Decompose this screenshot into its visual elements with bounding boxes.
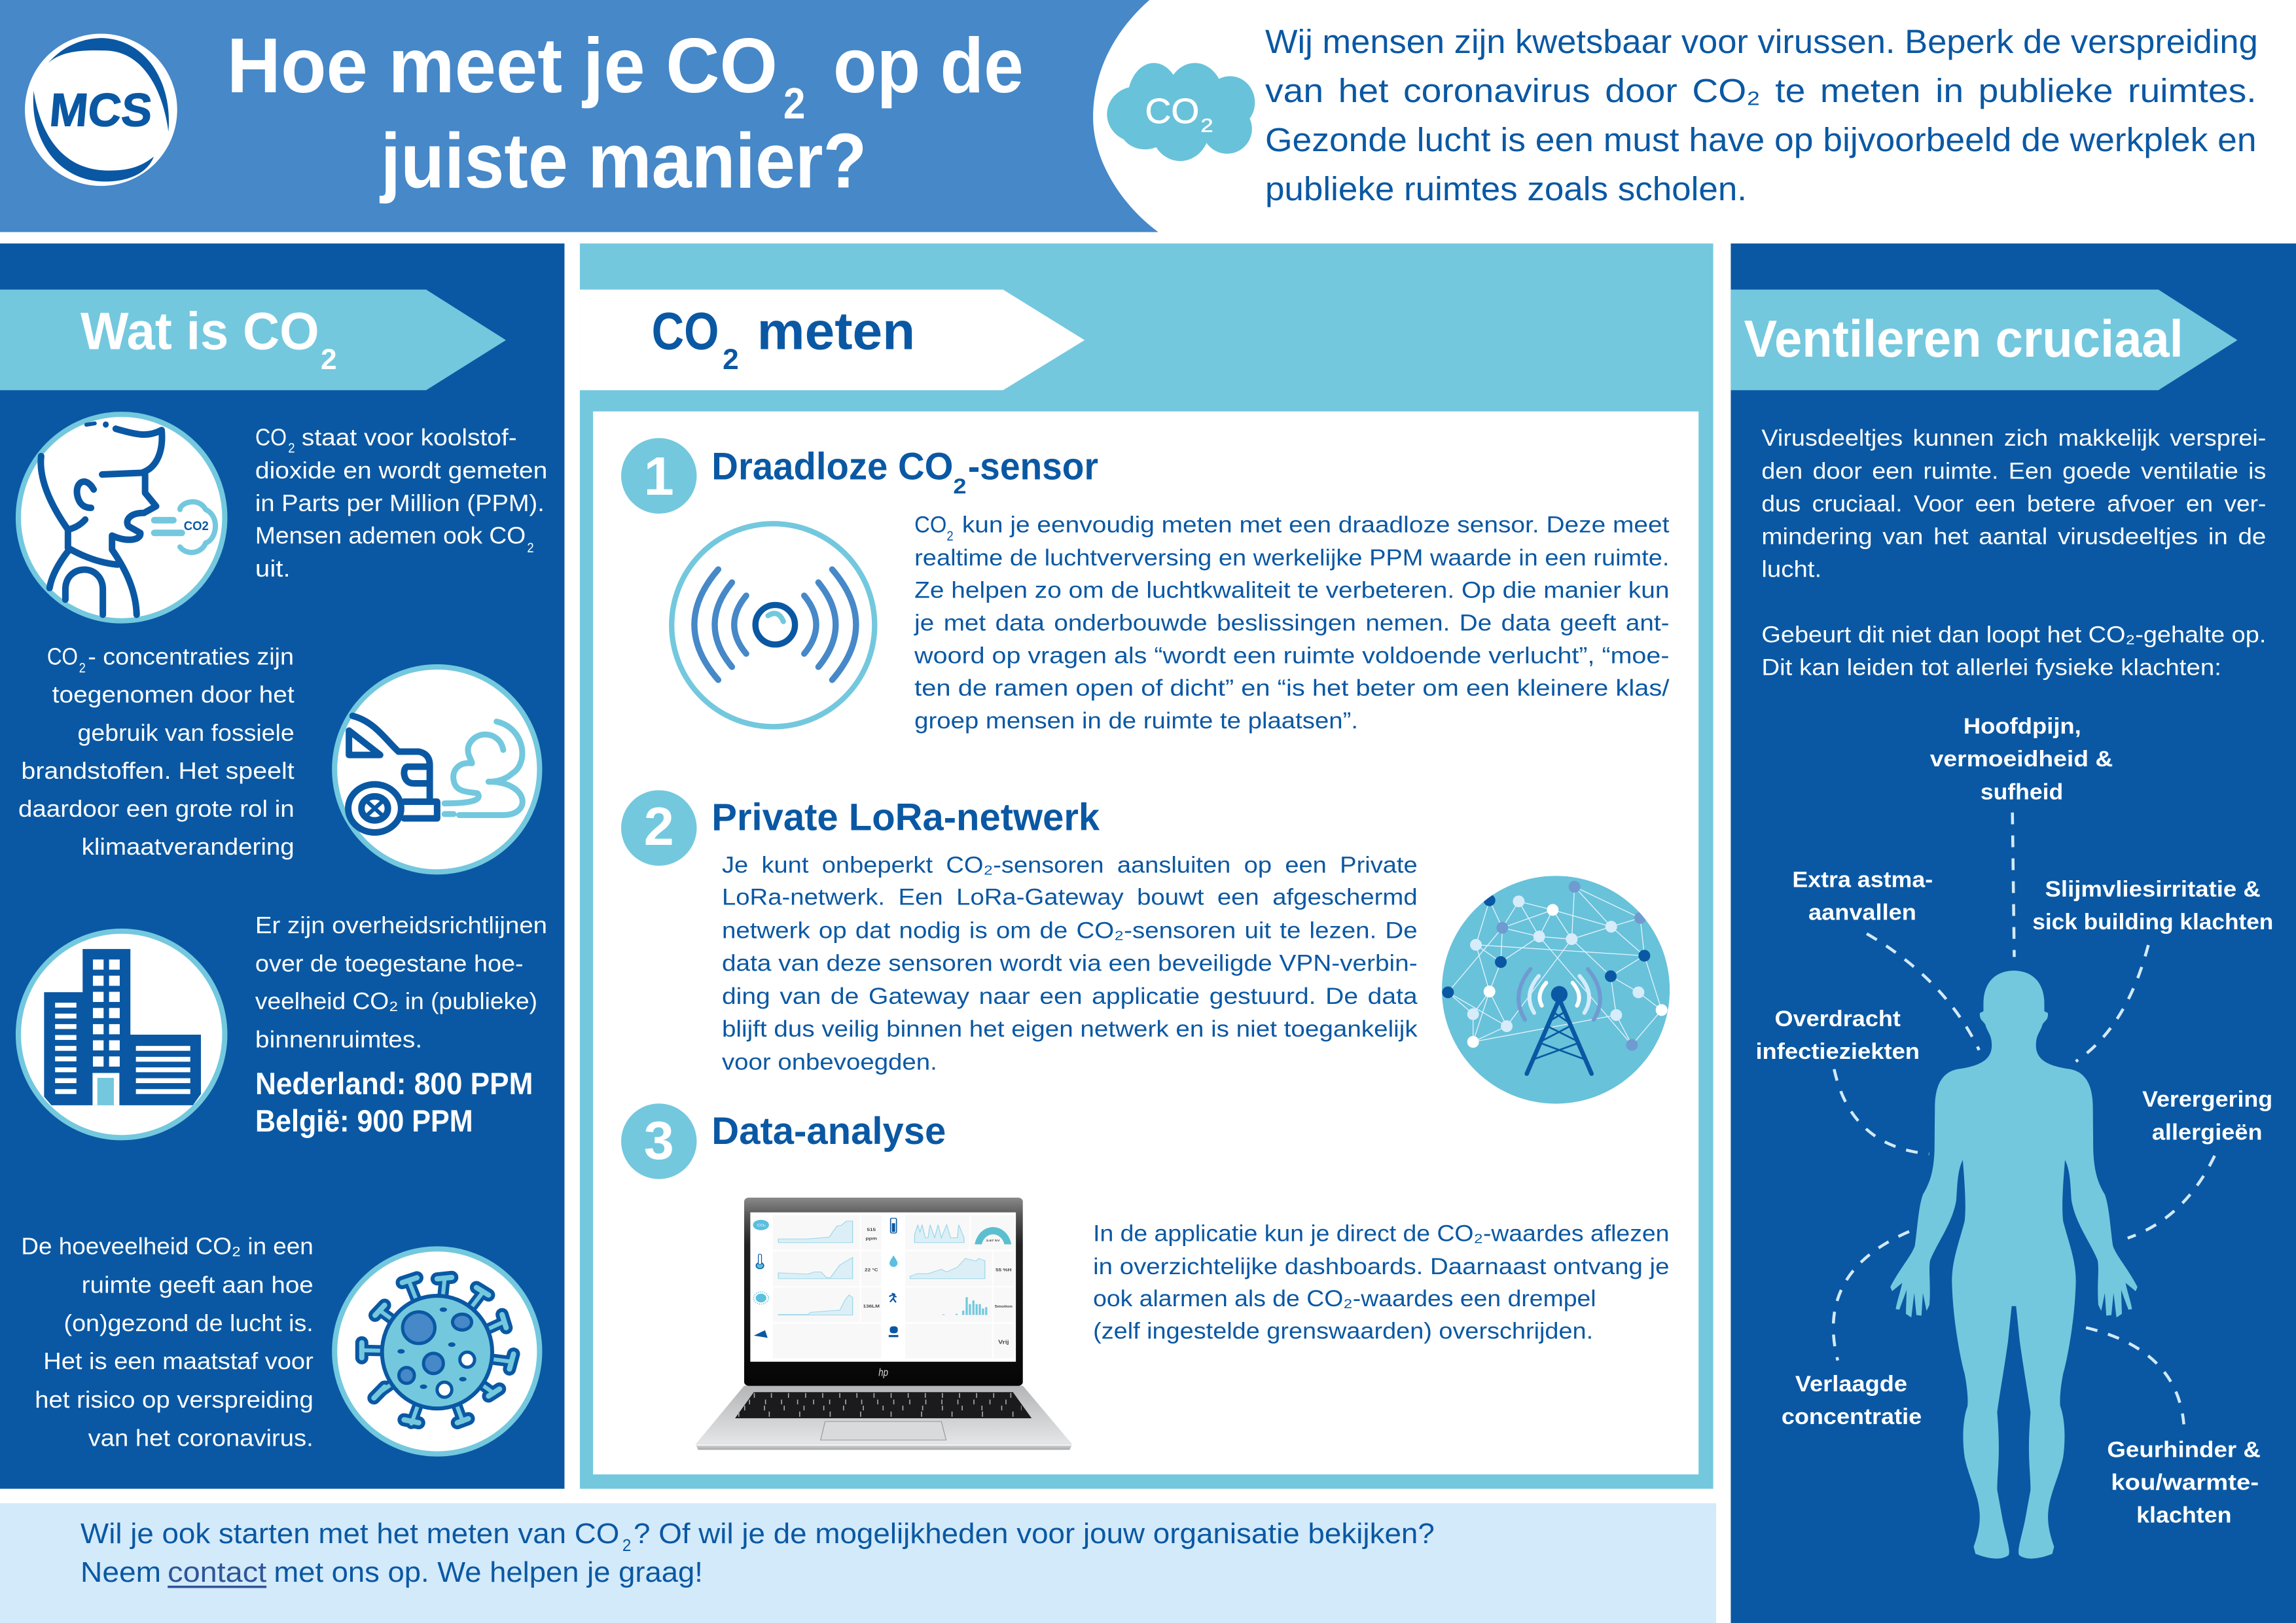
laptop with dashboard [696,1198,1072,1450]
text: LoRa description: netwerk op dat nodig is om de CO₂-sensoren uit te lezen. De [722,918,1418,943]
panel: CO2 meten [580,243,1713,1489]
logo: MCS [25,33,177,186]
call to action bar: Neem [81,1557,161,1588]
text: LoRa description: blijft dus veilig binnen het eigen netwerk en is niet toegankelijk [722,1016,1418,1042]
text: air quality: (on)gezond de lucht is. [64,1310,314,1336]
text: LoRa description: data van deze sensoren wordt via een beveiligde VPN-verbin- [722,950,1418,976]
intro text: Wij mensen zijn kwetsbaar voor virussen. Beperk de verspreiding [1265,22,2258,60]
text: LoRa description: Je kunt onbeperkt CO₂-sensoren aansluiten op een Private [722,852,1418,878]
title: 2 [783,79,805,128]
text: dashboard description: in overzichtelijke dashboards. Daarnaast ontvang je [1093,1254,1669,1279]
text: air quality: ruimte geeft aan hoe [82,1272,314,1298]
heading arrow: Wat is CO2: 2 [321,343,337,376]
text: dashboard description: ook alarmen als de CO₂-waardes een drempel [1093,1286,1596,1311]
call to action bar: contact [168,1557,266,1588]
dashboard values [863,1227,1013,1346]
text: sensor description: groep mensen in de ruimte te plaatsen”. [914,708,1358,734]
complaint labels: Overdracht [1775,1007,1901,1031]
dashboard values: 515 [867,1227,876,1232]
text: air quality [21,1234,314,1452]
icon: CO2 cloud [1107,63,1255,161]
text: ventilation intro: Dit kan leiden tot allerlei fysieke klachten: [1761,654,2221,680]
title: juiste manier? [380,118,867,204]
complaint labels: infectieziekten [1755,1039,1920,1064]
text: LoRa description [722,852,1418,1075]
body figure with complaints [1755,714,2273,1559]
icon: coronavirus [334,1249,539,1454]
text: dashboard description: In de applicatie kun je direct de CO₂-waardes aflezen [1093,1221,1669,1247]
dashboard values: 55 %H [996,1267,1012,1272]
text: fossil fuels: CO [47,644,78,670]
text: dashboard description [1093,1221,1669,1344]
text: ventilation intro: den door een ruimte. Een goede ventilatie is [1761,458,2266,484]
dashboard values: 5motion [995,1305,1013,1309]
text: ventilation intro: lucht. [1761,556,1821,582]
call to action bar: Wil je ook starten met het meten van CO [81,1518,619,1550]
text: guidelines: Nederland: 800 PPM [255,1066,533,1101]
text: what is CO2: dioxide en wordt gemeten [255,457,547,484]
text: sensor description: CO [914,512,946,538]
human body silhouette [1890,971,2138,1559]
text: what is CO2 [255,425,547,582]
call to action bar [0,1503,1716,1623]
complaint labels: allergieën [2152,1120,2263,1145]
text: ventilation intro [1761,425,2266,680]
text: what is CO2: Mensen ademen ook CO [255,522,526,548]
step 2: Private LoRa-netwerk heading [621,790,1100,866]
text: sensor description: realtime de luchtverversing en werkelijke PPM waarde in een ruimte. [914,545,1669,571]
icon: car exhaust [334,667,539,872]
text: what is CO2: staat voor koolstof- [302,425,517,451]
text: fossil fuels: klimaatverandering [82,834,295,860]
heading arrow: CO2 meten: meten [757,302,915,361]
text: ventilation intro: mindering van het aantal virusdeeltjes in de [1761,524,2266,549]
step 1: Draadloze CO2-sensor heading: 1 [644,446,674,507]
text: what is CO2: 2 [527,540,534,556]
logo: MCS: MCS [47,84,154,136]
dashboard values: 3.67 kV [986,1239,1000,1243]
heading arrow: Wat is CO2 [0,290,506,390]
call to action bar: 2 [622,1537,631,1555]
text: sensor description: kun je eenvoudig meten met een draadloze sensor. Deze meet [962,512,1670,538]
complaint labels: vermoeidheid & [1930,747,2113,772]
step 3: Data-analyse heading: 3 [644,1110,674,1171]
step 1: Draadloze CO2-sensor heading: -sensor [968,446,1098,488]
dashboard icons: CO₂ [757,1223,766,1228]
text: guidelines [255,912,547,1138]
intro text: publieke ruimtes zoals scholen. [1265,169,1747,207]
text: fossil fuels: - concentraties zijn [88,644,294,670]
call to action bar: ? Of wil je de mogelijkheden voor jouw organisatie bekijken? [634,1518,1435,1550]
dashed connector lines [1833,813,2215,1424]
text: guidelines: veelheid CO₂ in (publieke) [255,988,537,1014]
text: dashboard description: (zelf ingestelde grenswaarden) overschrijden. [1093,1318,1593,1344]
text: air quality: het risico op verspreiding [35,1387,314,1413]
panel: Ventileren cruciaal [1731,243,2296,1623]
icon: CO2 cloud: 2 [1201,115,1213,136]
text: LoRa description: voor onbevoegden. [722,1049,937,1075]
step 3: Data-analyse heading: Data-analyse [711,1110,946,1152]
text: air quality: van het coronavirus. [88,1425,314,1452]
text: what is CO2: 2 [288,440,295,456]
text: what is CO2: in Parts per Million (PPM). [255,490,545,516]
dashboard values: ppm [866,1236,877,1241]
complaint labels: klachten [2136,1503,2232,1528]
text: sensor description: Ze helpen zo om de luchtkwaliteit te verbeteren. Op die manier kun [914,578,1669,603]
complaint labels: kou/warmte- [2111,1471,2259,1495]
text: sensor description: woord op vragen als “wordt een ruimte voldoende verlucht”, “moe- [914,643,1669,668]
text: what is CO2: uit. [255,556,291,582]
text: sensor description: je met data onderbouwde beslissingen nemen. De data geeft ant- [914,611,1669,636]
call to action bar: met ons op. We helpen je graag! [274,1557,703,1588]
text: ventilation intro: Virusdeeltjes kunnen zich makkelijk versprei- [1761,425,2266,451]
step 3: Data-analyse heading [621,1103,946,1179]
heading arrow: Wat is CO2: Wat is CO [81,302,319,361]
icon: buildings [18,931,224,1137]
heading arrow: Ventileren cruciaal: Ventileren cruciaal [1744,310,2183,368]
step 2: Private LoRa-netwerk heading: Private LoRa-netwerk [711,796,1100,839]
complaint labels: Slijmvliesirritatie & [2045,877,2261,902]
title: Hoe meet je CO [227,23,778,109]
step 2: Private LoRa-netwerk heading: 2 [644,796,674,857]
text: ventilation intro: Gebeurt dit niet dan loopt het CO₂-gehalte op. [1761,622,2266,647]
text: sensor description: 2 [946,528,954,544]
text: fossil fuels: daardoor een grote rol in [18,796,295,822]
icon: person breathing out CO2 [18,414,224,621]
heading arrow: CO2 meten: CO [652,302,719,361]
complaint labels: Hoofdpijn, [1964,714,2081,739]
panel: Wat is CO2 [0,243,564,1489]
complaint labels: aanvallen [1808,900,1916,925]
heading arrow: CO2 meten: 2 [723,343,739,376]
heading arrow: Ventileren cruciaal [1731,290,2238,390]
text: ventilation intro: dus cruciaal. Voor een betere afvoer en ver- [1761,491,2266,517]
text: guidelines: over de toegestane hoe- [255,951,524,977]
header banner [0,0,1158,232]
intro text: Gezonde lucht is een must have op bijvoorbeeld de werkplek en [1265,120,2257,158]
text: fossil fuels: gebruik van fossiele [78,720,295,746]
text: air quality: Het is een maatstaf voor [43,1348,314,1374]
dashboard values: 136LM [863,1304,880,1309]
title: op de [833,23,1024,109]
complaint labels: Extra astma- [1792,867,1933,892]
intro text [1265,22,2258,207]
title [227,23,1024,204]
step 1: Draadloze CO2-sensor heading [621,438,1098,514]
text: fossil fuels: brandstoffen. Het speelt [21,758,295,784]
icon: LoRa network tower [1442,876,1670,1103]
step 1: Draadloze CO2-sensor heading: 2 [953,474,967,498]
heading arrow: CO2 meten [580,290,1085,390]
dashboard icons [753,1219,899,1338]
dashboard values: Vrij [998,1339,1009,1346]
complaint labels: Geurhinder & [2107,1437,2261,1462]
text: fossil fuels: toegenomen door het [52,681,295,707]
text: guidelines: Er zijn overheidsrichtlijnen [255,912,547,938]
text: sensor description [914,512,1670,734]
text: fossil fuels [18,644,295,860]
complaint labels: Verlaagde [1795,1372,1907,1397]
text: sensor description: ten de ramen open of dicht” en “is het beter om een kleinere klas/ [914,675,1670,701]
text: fossil fuels: 2 [79,660,86,675]
text: air quality: De hoeveelheid CO₂ in een [21,1234,314,1260]
text: guidelines: België: 900 PPM [255,1103,473,1138]
complaint labels: sick building klachten [2032,910,2273,935]
dashboard screen [753,1215,1014,1359]
dashboard values: 22 °C [865,1267,878,1272]
complaint labels [1755,714,2273,1528]
text: guidelines: binnenruimtes. [255,1027,422,1053]
complaint labels: concentratie [1782,1404,1922,1429]
icon: CO2 cloud: CO [1145,92,1199,131]
laptop with dashboard: hp [878,1366,888,1378]
complaint labels: Verergering [2142,1087,2272,1112]
step 1: Draadloze CO2-sensor heading: Draadloze CO [711,446,953,488]
intro text: van het coronavirus door CO₂ te meten in publieke ruimtes. [1265,71,2257,109]
text: LoRa description: LoRa-netwerk. Een LoRa-Gateway bouwt een afgeschermd [722,885,1418,910]
icon: wireless sensor [672,524,874,726]
icon: person breathing out CO2: CO2 [184,520,209,533]
complaint labels: sufheid [1981,779,2063,804]
text: LoRa description: ding van de Gateway naar een applicatie gestuurd. De data [722,984,1418,1009]
text: what is CO2: CO [255,425,287,451]
